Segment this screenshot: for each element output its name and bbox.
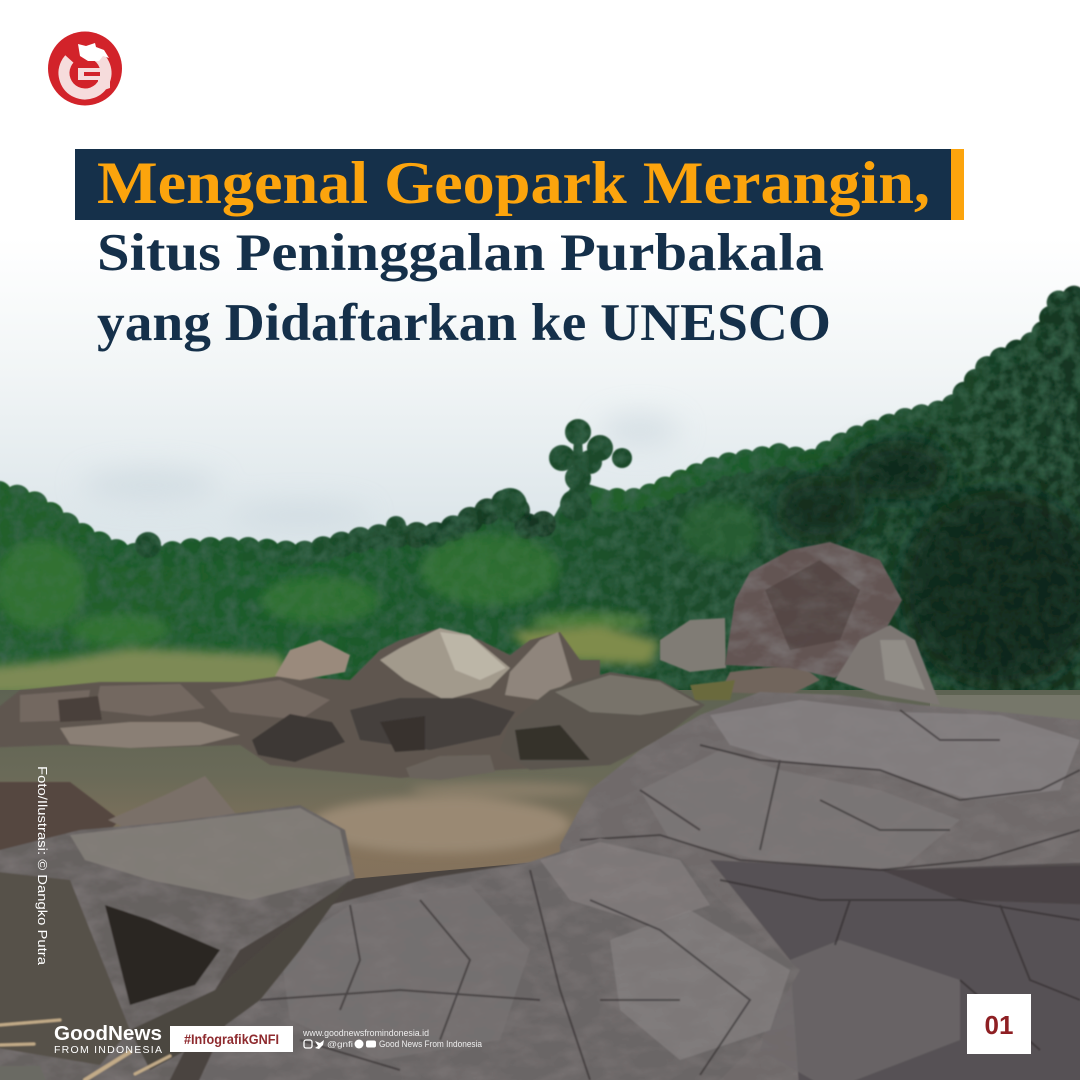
title line 3: yang Didaftarkan ke UNESCO bbox=[97, 294, 831, 352]
icon: twitter bbox=[315, 1040, 324, 1049]
right foreground rock bbox=[560, 692, 1080, 1080]
icon: youtube bbox=[366, 1040, 376, 1048]
sky bbox=[0, 0, 1080, 720]
icon: facebook bbox=[354, 1040, 364, 1048]
footer brand: GoodNews from Indonesia: GoodNews bbox=[54, 1022, 162, 1045]
logo: GNFI red circle emblem bbox=[48, 32, 122, 106]
footer social links: @gnfi bbox=[327, 1039, 353, 1049]
title block bbox=[75, 149, 964, 352]
grass bank bbox=[0, 648, 300, 695]
footer social links: www.goodnewsfromindonesia.id bbox=[302, 1028, 429, 1038]
page number badge bbox=[967, 994, 1031, 1054]
title line 1: Mengenal Geopark Merangin, bbox=[97, 150, 930, 216]
forest bbox=[0, 295, 1080, 700]
page number badge: 01 bbox=[985, 1010, 1013, 1040]
clouds bbox=[80, 414, 680, 527]
river and base shade bbox=[0, 690, 1080, 1080]
photo credit: Foto/Ilustrasi: © Dangko Putra bbox=[35, 766, 49, 965]
footer brand: GoodNews from Indonesia: FROM INDONESIA bbox=[54, 1044, 162, 1056]
footer social links bbox=[302, 1028, 482, 1049]
midground rocks bbox=[0, 618, 820, 780]
icon: instagram bbox=[304, 1040, 312, 1048]
orange accent bar bbox=[951, 149, 964, 220]
balancing boulder bbox=[725, 542, 940, 705]
lower foreground rock bbox=[190, 838, 800, 1080]
tall tree bbox=[135, 419, 632, 558]
footer social links: Good News From Indonesia bbox=[379, 1039, 482, 1049]
footer brand: GoodNews from Indonesia bbox=[54, 1022, 162, 1056]
hashtag label bbox=[170, 1026, 293, 1052]
title line 2: Situs Peninggalan Purbakala bbox=[97, 224, 824, 282]
left foreground rocks bbox=[0, 776, 355, 1080]
hashtag label: #InfografikGNFI bbox=[184, 1032, 279, 1047]
title band bbox=[75, 149, 951, 220]
